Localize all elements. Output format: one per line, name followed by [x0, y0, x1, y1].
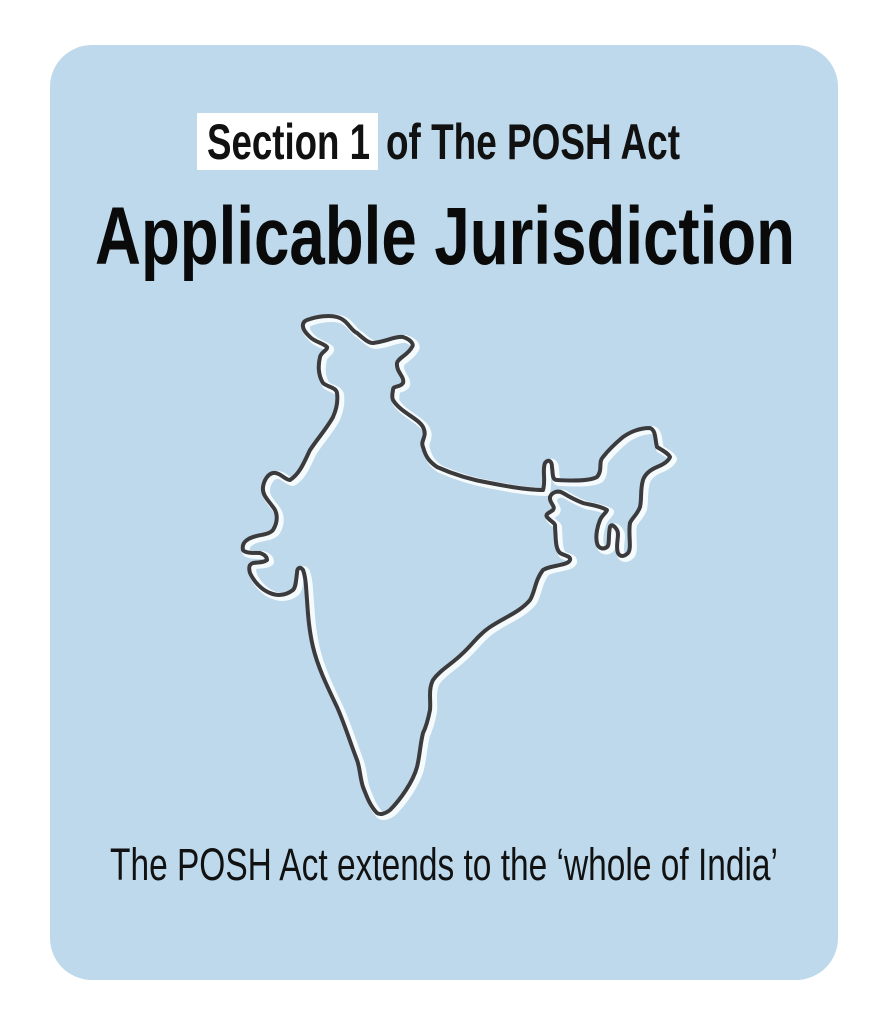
- heading: section label: [197, 113, 680, 170]
- heading: section label: Section 1: [207, 114, 370, 170]
- heading: section label: of The POSH Act: [386, 114, 680, 170]
- map: India outline: [243, 316, 673, 816]
